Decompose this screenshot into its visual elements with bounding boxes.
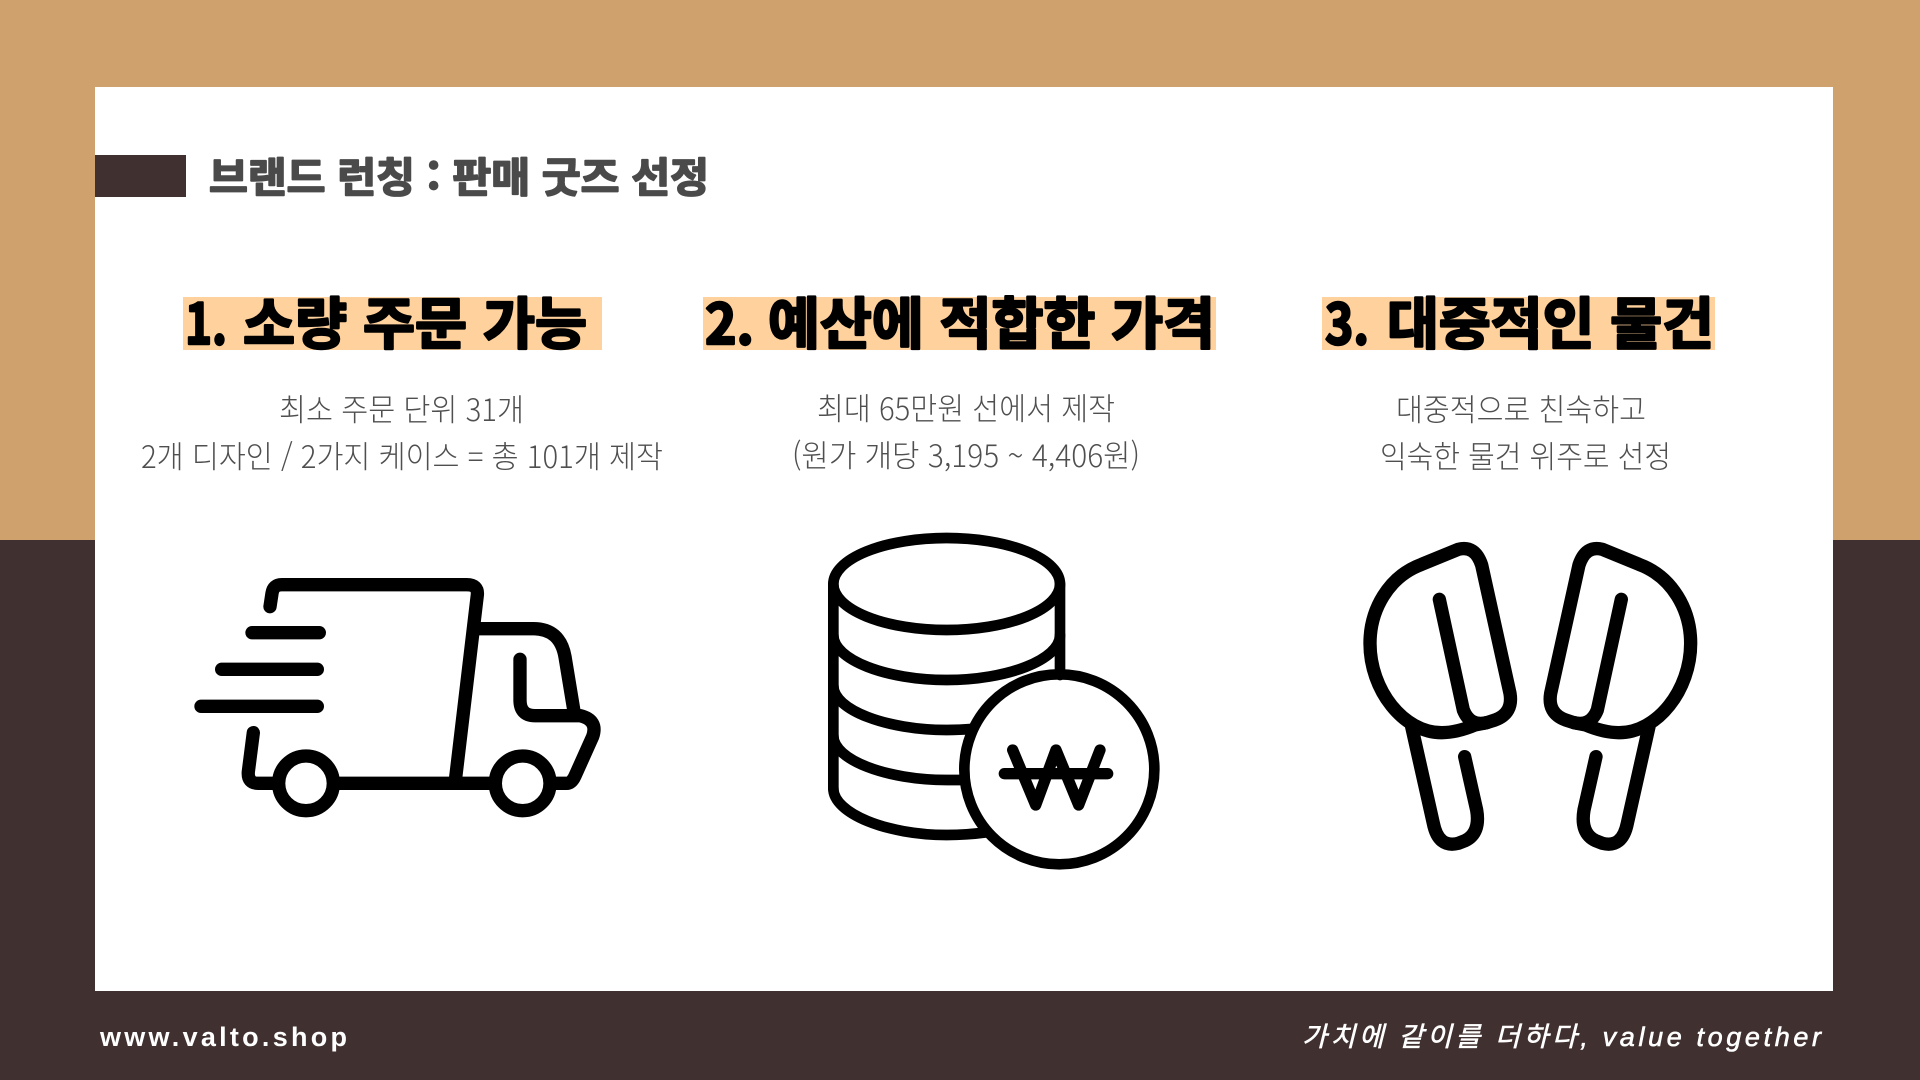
- panel: white content card: [95, 87, 1833, 991]
- icon: wireless earbuds: [1370, 549, 1691, 844]
- panel: column 2 budget price: [703, 280, 1216, 864]
- description line 1: 최대 65만원 선에서 제작: [817, 384, 1115, 429]
- heading: popular items: 3.: [1325, 280, 1369, 361]
- heading: small order: 1.: [185, 280, 227, 361]
- heading highlight 1: [183, 297, 602, 350]
- panel: column 3 popular items: [1322, 280, 1715, 844]
- heading: popular items: 대중적인 물건: [1387, 280, 1714, 361]
- background: dark lower band: [0, 540, 1920, 1080]
- title: 브랜드 런칭 : 판매 굿즈 선정: [209, 144, 709, 204]
- heading highlight 3: [1322, 297, 1715, 350]
- description line 1: 최소 주문 단위 31개: [279, 385, 524, 430]
- heading highlight 2: [703, 297, 1216, 350]
- background: tan upper band: [0, 0, 1920, 540]
- panel: column 1 small order: [141, 280, 663, 811]
- description line 2: 2개 디자인 / 2가지 케이스 = 총 101개 제작: [141, 432, 663, 477]
- heading: budget price: 2.: [705, 280, 754, 361]
- icon: delivery truck: [201, 585, 594, 811]
- heading: small order: 소량 주문 가능: [243, 280, 587, 361]
- footer: slogan: 가치에 같이를 더하다, value together: [1302, 1022, 1822, 1052]
- footer: website: www.valto.shop: [99, 1022, 347, 1052]
- heading accent bar: [95, 155, 186, 197]
- description line 2: 익숙한 물건 위주로 선정: [1380, 432, 1671, 477]
- description line 1: 대중적으로 친숙하고: [1396, 385, 1646, 430]
- icon: coin stack with won: [833, 538, 1154, 864]
- heading: budget price: 예산에 적합한 가격: [768, 280, 1215, 361]
- description line 2: (원가 개당 3,195 ~ 4,406원): [792, 431, 1140, 476]
